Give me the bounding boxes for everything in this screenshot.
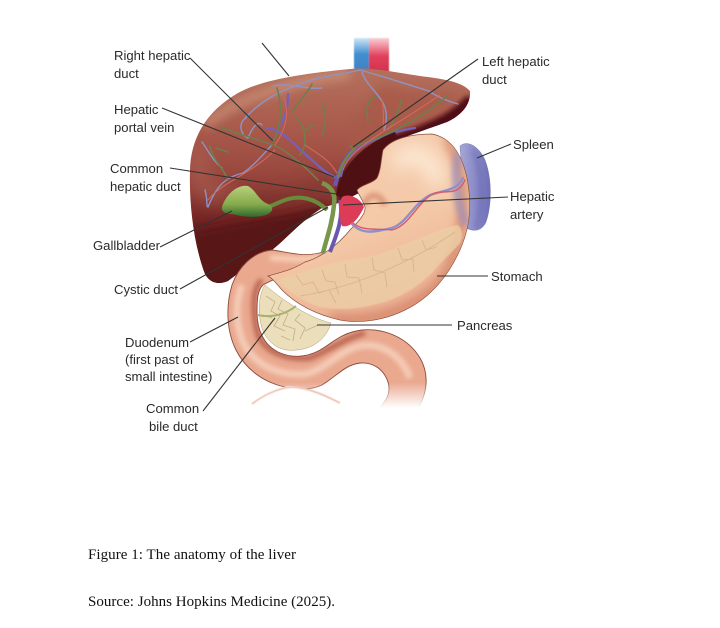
- stomach arteries: [352, 178, 465, 232]
- leader lines: [160, 43, 511, 411]
- label: cystic duct: Cystic duct: [114, 282, 178, 297]
- label: common bile duct: bile duct: [149, 419, 198, 434]
- label: stomach: Stomach: [491, 269, 543, 284]
- source line: Source: Johns Hopkins Medicine (2025).: [88, 594, 335, 610]
- label: left hepatic duct: duct: [482, 72, 507, 87]
- bile duct and gallbladder: [222, 148, 364, 253]
- label: common hepatic duct: Common: [110, 161, 163, 176]
- bottom fade: [235, 382, 445, 422]
- label: spleen: Spleen: [513, 137, 554, 152]
- label: pancreas: Pancreas: [457, 318, 513, 333]
- label: duodenum: (first past of: [125, 352, 194, 367]
- label: duodenum: small intestine): [125, 369, 212, 384]
- intestine and duodenum: [228, 250, 426, 416]
- pancreas head: [258, 285, 331, 350]
- pancreas body: [277, 225, 462, 309]
- liver underside behind stomach: [336, 132, 400, 200]
- label: hepatic artery: artery: [510, 207, 544, 222]
- label: right hepatic duct: Right hepatic: [114, 48, 190, 63]
- label: gallbladder: Gallbladder: [93, 238, 161, 253]
- label: right hepatic duct: duct: [114, 66, 139, 81]
- label: common hepatic duct: hepatic duct: [110, 179, 181, 194]
- liver shading: [192, 74, 478, 300]
- liver blood vessels and ducts: [202, 70, 458, 207]
- label: hepatic artery: Hepatic: [510, 189, 554, 204]
- liver: [190, 69, 478, 300]
- vessels at top: vena cava and aorta: [354, 38, 389, 78]
- label: hepatic portal vein: portal vein: [114, 120, 174, 135]
- spleen: [460, 144, 490, 230]
- label: common bile duct: Common: [146, 401, 199, 416]
- figure caption: Figure 1: The anatomy of the liver: [88, 547, 296, 563]
- stomach: [268, 134, 470, 322]
- label: duodenum: Duodenum: [125, 335, 189, 350]
- figure: liver anatomy with caption: [88, 38, 554, 610]
- label: left hepatic duct: Left hepatic: [482, 54, 550, 69]
- label: hepatic portal vein: Hepatic: [114, 102, 158, 117]
